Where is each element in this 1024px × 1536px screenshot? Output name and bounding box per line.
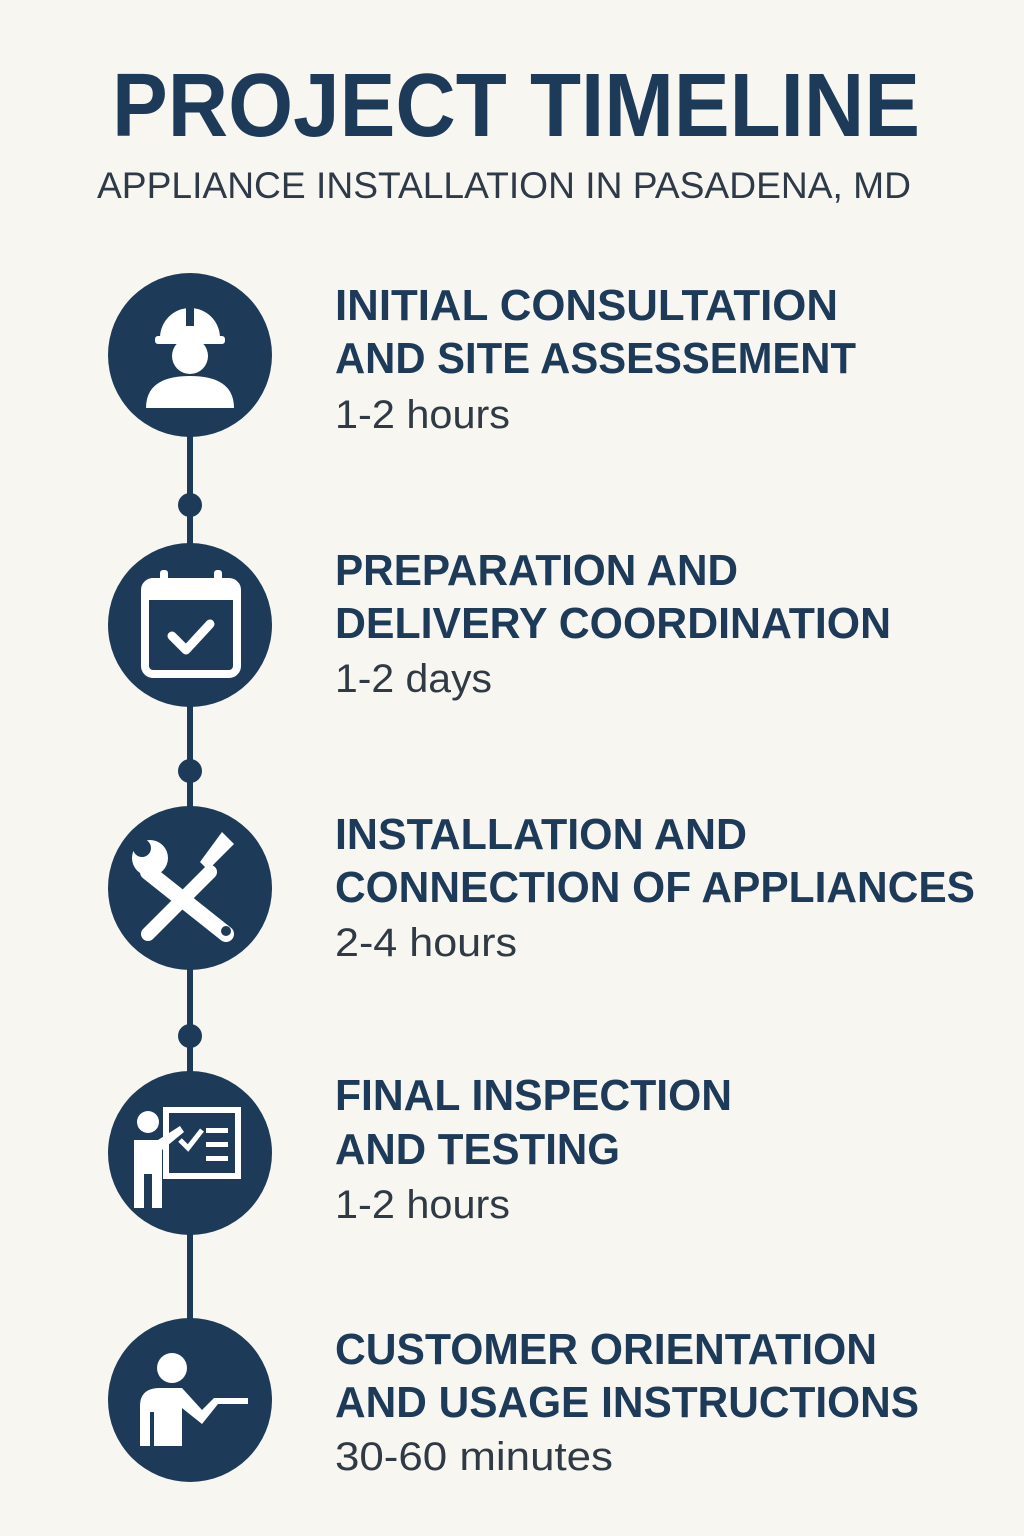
text: step 3: INSTALLATION AND — [335, 810, 747, 859]
icon: wrench and screwdriver — [108, 806, 272, 970]
text: step 4 — [335, 1071, 732, 1227]
step 5: orientation — [108, 1318, 919, 1482]
text: step 4: 1-2 hours — [335, 1183, 510, 1227]
icon: presenter with board — [108, 1071, 272, 1235]
text: step 1: 1-2 hours — [335, 393, 510, 437]
icon: calendar — [108, 543, 272, 707]
title: PROJECT TIMELINE — [112, 56, 920, 156]
icon: person pointing — [108, 1318, 272, 1482]
text: step 1: INITIAL CONSULTATION — [335, 281, 838, 330]
text: step 2: 1-2 days — [335, 657, 492, 701]
text: step 4: FINAL INSPECTION — [335, 1071, 732, 1120]
text: step 2 — [335, 546, 891, 701]
text: step 5: 30-60 minutes — [335, 1435, 613, 1479]
text: step 5 — [335, 1325, 919, 1479]
text: step 4: AND TESTING — [335, 1125, 620, 1174]
text: step 3 — [335, 810, 975, 965]
step 3: installation — [108, 806, 975, 970]
text: step 2: PREPARATION AND — [335, 546, 738, 595]
text: step 5: CUSTOMER ORIENTATION — [335, 1325, 877, 1374]
text: step 1: AND SITE ASSESSEMENT — [335, 334, 856, 383]
text: step 1 — [335, 281, 856, 437]
step 2: preparation — [108, 543, 891, 707]
icon: worker — [108, 273, 272, 437]
step 1: consultation — [108, 273, 856, 437]
timeline connector — [178, 355, 202, 1400]
text: step 5: AND USAGE INSTRUCTIONS — [335, 1378, 919, 1427]
step 4: inspection — [108, 1071, 732, 1235]
text: step 2: DELIVERY COORDINATION — [335, 599, 891, 648]
text: step 3: CONNECTION OF APPLIANCES — [335, 863, 975, 912]
text: step 3: 2-4 hours — [335, 921, 517, 965]
subtitle: APPLIANCE INSTALLATION IN PASADENA, MD — [97, 165, 911, 206]
